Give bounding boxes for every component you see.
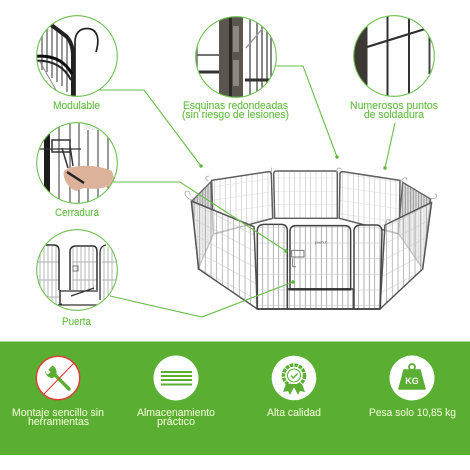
text: Almacenamiento práctico: Almacenamiento bbox=[137, 407, 215, 419]
label: Puerta: Puerta bbox=[62, 316, 92, 328]
label: Modulable: Modulable bbox=[53, 100, 100, 112]
label: Esquinas redondeadas: Esquinas redondeadas bbox=[183, 100, 288, 112]
icon: weight bbox=[390, 356, 434, 400]
leader dots bbox=[199, 155, 387, 284]
leader: Puerta bbox=[110, 282, 293, 317]
label: Esquinas redondeadas bbox=[182, 100, 289, 121]
label: Numerosos puntos de soldadura: de soldadura bbox=[364, 109, 425, 121]
text: Alta calidad: Alta calidad bbox=[267, 407, 321, 419]
circle detail: Modulable bbox=[30, 16, 117, 100]
product photo: octagonal dog pen: pawhut bbox=[315, 241, 327, 245]
text: Montaje sencillo sin herramientas bbox=[12, 407, 104, 428]
leader lines bbox=[100, 66, 395, 317]
label: Cerradura: Cerradura bbox=[55, 207, 100, 219]
text: Almacenamiento práctico bbox=[137, 407, 215, 428]
text: Montaje sencillo sin herramientas: herramientas bbox=[28, 416, 89, 428]
leader: Numerosos puntos bbox=[385, 123, 395, 168]
label: Numerosos puntos de soldadura bbox=[350, 100, 438, 121]
label: Numerosos puntos de soldadura: Numerosos puntos bbox=[350, 100, 438, 112]
text: Almacenamiento práctico: práctico bbox=[157, 416, 195, 428]
leader: Esquinas redondeadas bbox=[276, 66, 337, 157]
icon: weight: KG bbox=[405, 376, 419, 386]
circle detail: Cerradura bbox=[37, 120, 117, 205]
text: Pesa solo 10,85 kg: Pesa solo 10,85 kg bbox=[369, 407, 456, 419]
leader: Cerradura bbox=[113, 182, 286, 251]
icon: compact storage bbox=[154, 356, 198, 400]
icon: no tools bbox=[36, 356, 80, 400]
leader: Modulable bbox=[100, 90, 201, 166]
label: Esquinas redondeadas: (sin riesgo de lesiones) bbox=[182, 109, 289, 121]
icon: quality badge bbox=[272, 356, 316, 400]
green features band bbox=[0, 342, 470, 455]
circle detail: Puerta bbox=[36, 230, 117, 310]
circle detail: Numerosos puntos de soldadura bbox=[354, 16, 434, 96]
circle detail: Esquinas redondeadas bbox=[196, 17, 280, 97]
product photo: octagonal dog pen bbox=[185, 168, 437, 309]
text: Montaje sencillo sin herramientas: Montaje sencillo sin bbox=[12, 407, 104, 419]
